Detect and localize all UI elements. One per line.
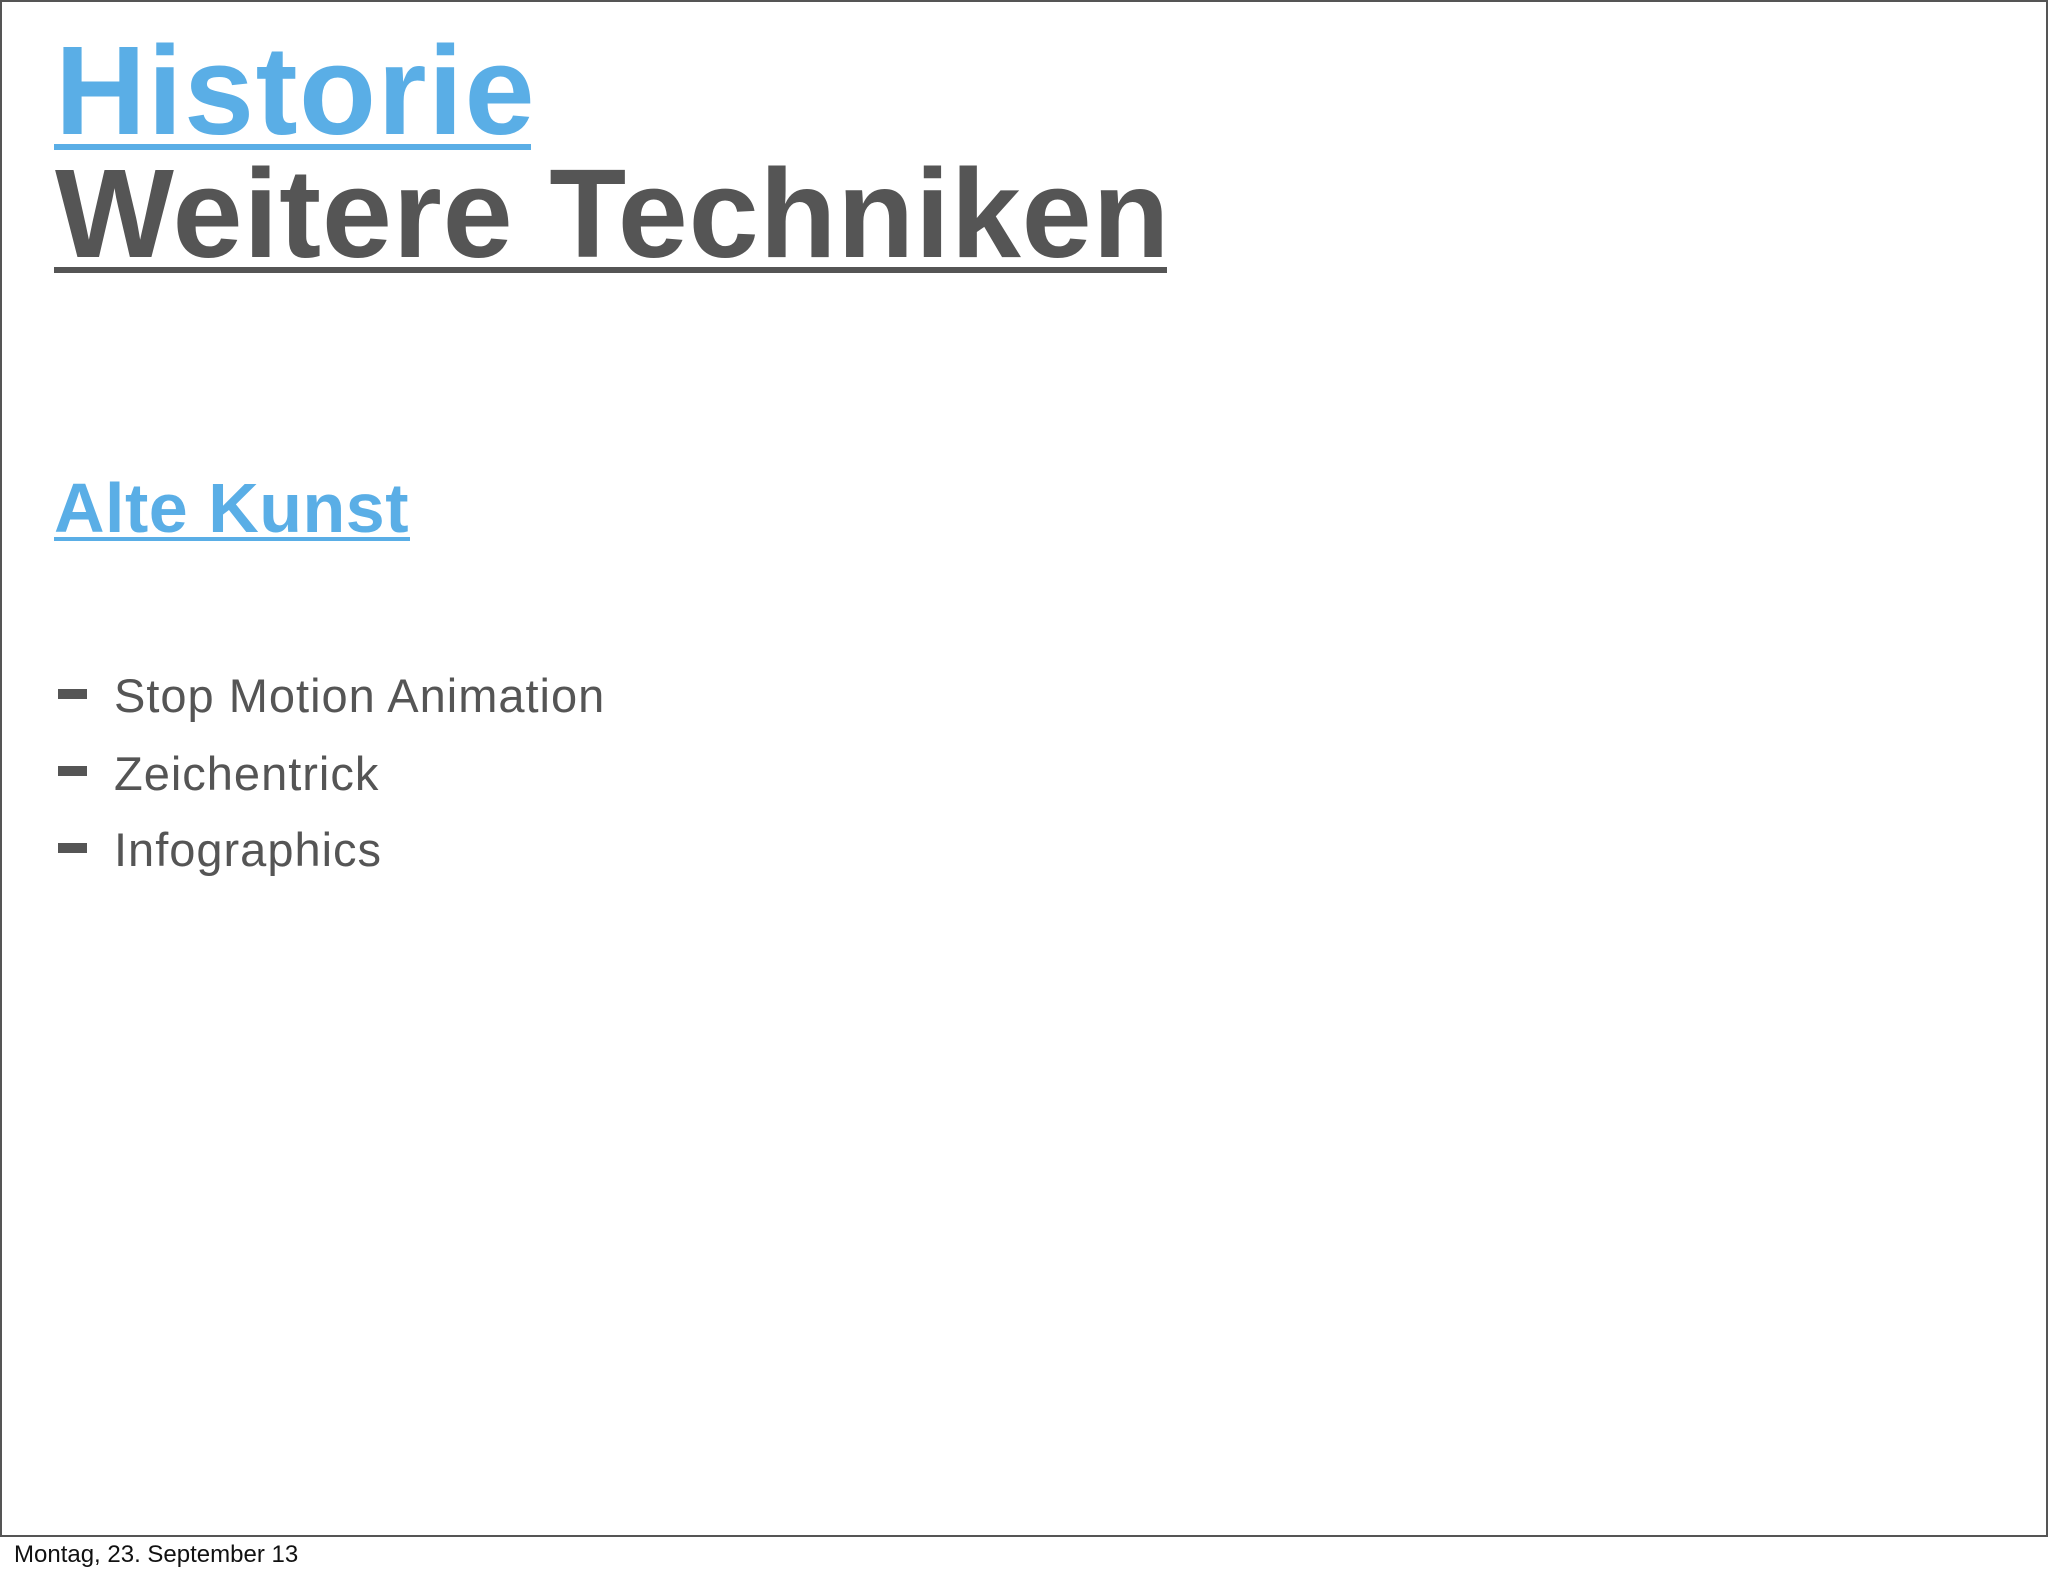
title: Weitere Techniken: Weitere Techniken xyxy=(55,143,1170,284)
bullet list xyxy=(58,669,605,876)
bullet: Zeichentrick: Zeichentrick xyxy=(114,747,379,800)
bullet: Infographics: Infographics xyxy=(114,823,382,876)
title: Historie: Historie xyxy=(55,20,536,161)
footer date: Montag, 23. September 13 xyxy=(14,1541,298,1568)
subheading: Alte Kunst: Alte Kunst xyxy=(54,469,409,547)
bullet: Stop Motion Animation: Stop Motion Animation xyxy=(114,669,605,722)
